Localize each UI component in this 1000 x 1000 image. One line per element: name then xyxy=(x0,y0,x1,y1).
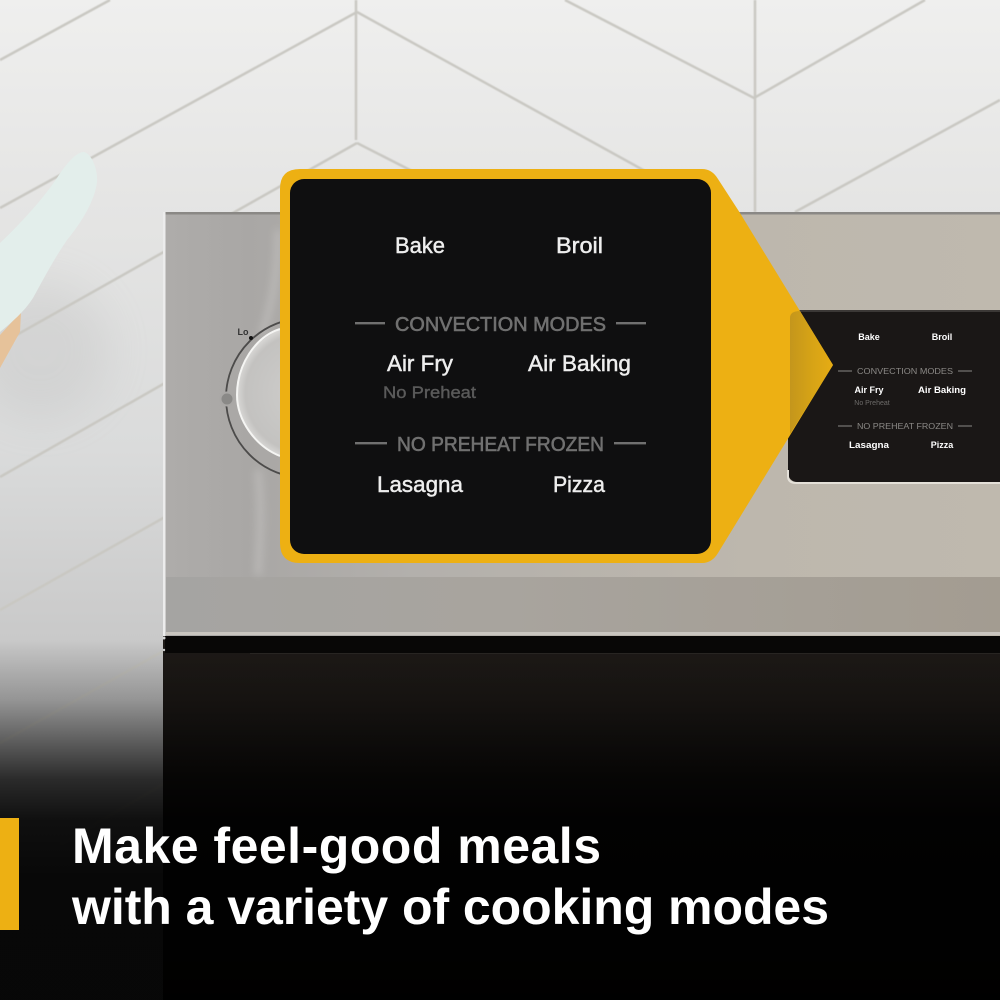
small panel labels: NO PREHEAT FROZEN xyxy=(857,422,953,431)
dial label: Lo xyxy=(238,327,249,337)
callout frame and pointer xyxy=(280,169,833,563)
pointer tip over display panel xyxy=(790,311,833,434)
oven dark lower door xyxy=(162,636,1000,1000)
mode: Air Baking: Air Baking xyxy=(528,351,631,376)
small panel labels: Lasagna xyxy=(849,440,890,450)
small panel labels xyxy=(849,332,966,450)
section heading: no preheat frozen: NO PREHEAT FROZEN xyxy=(397,434,604,456)
small panel labels: Bake xyxy=(858,332,880,342)
small panel labels: CONVECTION MODES xyxy=(857,367,953,376)
small panel labels: Pizza xyxy=(931,440,954,450)
note: no preheat: No Preheat xyxy=(383,383,476,402)
small panel labels: Broil xyxy=(932,332,952,342)
headline: with a variety of cooking modes xyxy=(71,879,829,935)
mode: Bake: Bake xyxy=(395,233,445,258)
mode: Pizza: Pizza xyxy=(553,472,606,497)
small panel labels: Air Baking xyxy=(918,385,966,395)
spatula on the left xyxy=(0,152,97,368)
oven control panel body xyxy=(163,212,1000,636)
headline accent bar xyxy=(0,818,19,930)
section heading: convection modes: CONVECTION MODES xyxy=(395,314,606,336)
mode: Lasagna: Lasagna xyxy=(377,472,464,497)
mode: Air Fry: Air Fry xyxy=(387,351,453,376)
callout screen with cooking modes xyxy=(290,179,711,554)
headline: Make feel-good meals xyxy=(72,818,601,874)
temperature dial xyxy=(220,318,386,478)
bottom dark fade xyxy=(0,640,1000,1000)
headline xyxy=(71,818,829,935)
small display panel on oven xyxy=(788,310,1000,483)
small panel labels: No Preheat xyxy=(854,400,890,407)
small panel labels: Air Fry xyxy=(854,385,884,395)
mode: Broil: Broil xyxy=(556,233,603,258)
